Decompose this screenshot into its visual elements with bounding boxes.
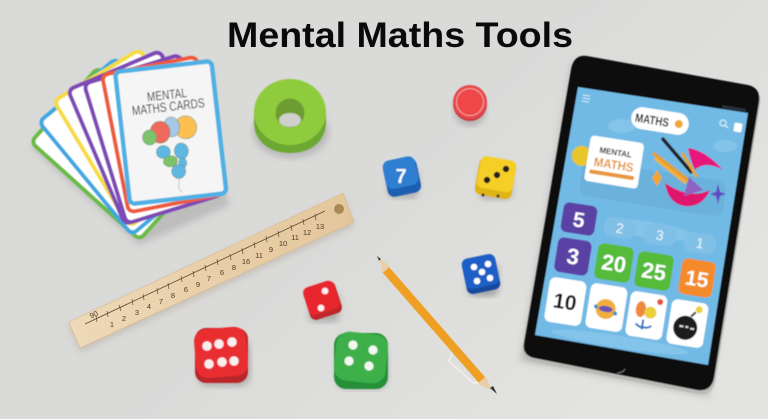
ruler numbers: 4 bbox=[147, 302, 151, 311]
icon: balloons bbox=[141, 114, 204, 196]
card: green bbox=[31, 68, 206, 240]
icon: large red die bbox=[193, 326, 250, 386]
ruler numbers: 9 bbox=[269, 245, 273, 254]
number chip: 1: 1 bbox=[695, 234, 705, 252]
ruler numbers: 8 bbox=[232, 263, 236, 272]
card: purple bbox=[68, 51, 217, 224]
ruler numbers: 2 bbox=[122, 314, 126, 323]
ruler numbers: 10 bbox=[279, 239, 287, 248]
ruler numbers: 12 bbox=[303, 228, 311, 237]
card: front card bbox=[115, 61, 226, 204]
card: yellow bbox=[54, 49, 215, 226]
ruler numbers: 7 bbox=[207, 274, 211, 283]
number tile: 20: 20 bbox=[600, 249, 628, 278]
mental maths card bbox=[568, 133, 644, 189]
number chip: 1 bbox=[682, 231, 717, 255]
number tile: 25: 25 bbox=[640, 257, 668, 286]
number tile: 10: 10 bbox=[551, 289, 578, 316]
ruler bbox=[69, 193, 354, 352]
card: second purple bbox=[84, 55, 222, 224]
number tile: 15: 15 bbox=[683, 266, 710, 293]
ruler numbers: 11 bbox=[291, 233, 299, 242]
ruler numbers: 7 bbox=[159, 297, 163, 306]
mental maths card: MATHS bbox=[593, 155, 635, 175]
card heading: MENTAL bbox=[146, 85, 188, 104]
icon: pencils and star creature bbox=[652, 138, 726, 206]
screen background blotches bbox=[550, 119, 737, 359]
icon: red button counter bbox=[453, 85, 487, 126]
icon: notification bbox=[733, 122, 743, 133]
icon: green ring bbox=[253, 79, 329, 158]
icon: yellow die bbox=[474, 155, 517, 200]
icon: small red die bbox=[302, 279, 343, 322]
ruler numbers: 6 bbox=[184, 285, 188, 294]
number chip: 3 bbox=[642, 223, 677, 247]
ruler numbers: 13 bbox=[316, 222, 324, 231]
ruler numbers: 8 bbox=[171, 291, 175, 300]
ruler numbers: 3 bbox=[135, 308, 139, 317]
picture tile: bomb bbox=[666, 298, 709, 349]
panel: tablet bbox=[520, 56, 760, 397]
number tile: 3 bbox=[553, 237, 592, 276]
number tile: 5 bbox=[560, 202, 598, 236]
icon: blue die with 7: 7 bbox=[395, 166, 407, 188]
ruler numbers: 11 bbox=[255, 251, 263, 260]
picture tile: flower bbox=[625, 290, 668, 341]
number chip: 2 bbox=[602, 216, 637, 240]
ruler scale line bbox=[85, 211, 325, 324]
number chip: 2: 2 bbox=[615, 219, 625, 237]
icon: menu bbox=[582, 95, 590, 102]
number tile: 15 bbox=[677, 258, 717, 298]
icon: search bbox=[720, 120, 728, 128]
number tile: 3: 3 bbox=[565, 243, 581, 270]
picture tile: creature bbox=[585, 282, 628, 333]
number tile: 10 bbox=[544, 276, 587, 327]
icon: blue die with pips bbox=[461, 253, 501, 296]
ruler numbers: 6 bbox=[220, 268, 224, 277]
card: front card: MATHS CARDS bbox=[131, 95, 206, 118]
icon: blue die with 7 bbox=[381, 155, 422, 198]
number tile: 25 bbox=[633, 250, 675, 292]
icon: green die bbox=[333, 330, 389, 389]
icon: orange pencil bbox=[377, 256, 497, 394]
status bar bbox=[722, 105, 746, 112]
title: Mental Maths Tools bbox=[227, 16, 573, 55]
mental maths card: MENTAL bbox=[599, 146, 633, 160]
screen shadow panel bbox=[578, 159, 727, 218]
ruler numbers: 1 bbox=[110, 320, 114, 329]
tablet body bbox=[524, 56, 759, 390]
panel: fan of mental maths cards bbox=[31, 49, 230, 245]
card: blue bbox=[39, 58, 209, 235]
number tile: 5: 5 bbox=[571, 208, 587, 233]
ruler numbers bbox=[88, 222, 324, 329]
maths pill: MATHS bbox=[634, 111, 670, 130]
ruler numbers: 90 bbox=[88, 309, 99, 320]
number tile: 20 bbox=[593, 242, 635, 284]
ruler numbers: 16 bbox=[242, 257, 250, 266]
card: red bbox=[102, 57, 223, 212]
tablet silver edge bbox=[523, 57, 760, 394]
number chip: 3: 3 bbox=[655, 226, 665, 244]
ruler hole bbox=[334, 204, 344, 214]
icon: home button bbox=[617, 369, 625, 373]
tablet screen bbox=[535, 87, 748, 365]
ruler numbers: 9 bbox=[196, 280, 200, 289]
maths pill bbox=[630, 106, 690, 136]
